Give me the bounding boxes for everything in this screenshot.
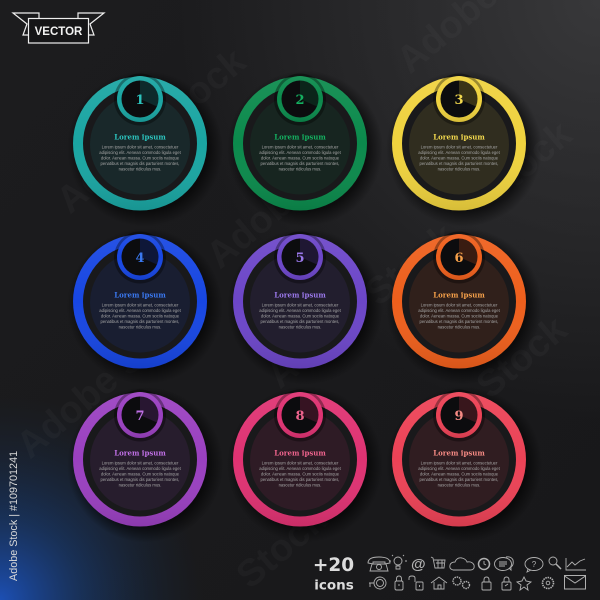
circle 2: adipiscing elit. Aenean commodo ligula eget [259,150,342,155]
circle 3: Lorem ipsum [433,132,485,142]
circle 2: dolor. Aenean massa. Cum sociis natoque [261,156,340,160]
icon: envelope [564,576,586,589]
circle 3: Lorem ipsum dolor sit amet, consectetuer [421,144,498,150]
watermarks: Stock [469,308,576,407]
circle 6: nascetur ridiculus mus. [438,324,480,330]
circle 5: Lorem ipsum dolor sit amet, consectetuer [262,302,339,308]
circle 9: 9 [454,409,464,424]
icon: gears [453,577,470,588]
+20 icons label: +20 [313,555,354,576]
circle 5: 5 [295,251,305,266]
circle 9 [386,386,542,542]
circle 1: Lorem ipsum dolor sit amet, consectetuer [102,144,179,150]
circle 8 [227,386,383,542]
circle 8: dolor. Aenean massa. Cum sociis natoque [261,472,340,476]
circle 5: nascetur ridiculus mus. [279,324,321,330]
icon: question bubble [525,558,543,572]
watermarks: Adobe Stock [9,285,214,467]
badge: vector ribbon: VECTOR [35,26,83,38]
circle 7: Lorem ipsum dolor sit amet, consectetuer [102,460,179,466]
circle 9: nascetur ridiculus mus. [438,482,480,488]
circle 6: Lorem ipsum dolor sit amet, consectetuer [421,302,498,308]
watermarks: Stock [229,498,336,597]
circle 5: Lorem ipsum [274,290,326,300]
circle 9: dolor. Aenean massa. Cum sociis natoque [420,472,499,476]
circle 3: 3 [454,93,464,108]
icon: padlock open [409,576,423,590]
circle 8: penatibus et magnis dis parturient montes, [261,477,339,482]
circle 1: dolor. Aenean massa. Cum sociis natoque [101,156,180,160]
icon: settings burst [542,578,554,588]
badge: vector ribbon [13,13,104,43]
circle 8: Lorem ipsum [274,448,326,458]
watermarks: Adobe Stock [259,215,464,397]
circle 1 [67,70,223,226]
icon: telephone [368,557,390,571]
+20 icons label [313,555,354,594]
icon: chat bubbles [494,557,513,570]
circle 4 [67,228,223,384]
circle 3: adipiscing elit. Aenean commodo ligula eget [418,150,501,155]
circle 5: adipiscing elit. Aenean commodo ligula eget [259,308,342,313]
circle 6 [386,228,542,384]
circle 3: penatibus et magnis dis parturient montes, [420,161,498,166]
icon: clock [478,558,490,570]
circle 9: Lorem ipsum dolor sit amet, consectetuer [421,460,498,466]
icon: at sign: @ [411,556,426,573]
icon: star [517,577,531,590]
circle 4: Lorem ipsum [114,290,166,300]
circle 9: penatibus et magnis dis parturient montes, [420,477,498,482]
stock id caption: Adobe Stock | #109701241 [8,451,20,581]
circle 3: nascetur ridiculus mus. [438,166,480,172]
watermarks: Stock [474,113,581,212]
circle 7 [67,386,223,542]
icon: house [431,577,447,589]
circle 5 [227,228,383,384]
+20 icons label: icons [314,578,354,594]
circle 2: nascetur ridiculus mus. [279,166,321,172]
icon: light bulb [389,555,407,569]
circle 7: adipiscing elit. Aenean commodo ligula eget [99,466,182,471]
circle 7: 7 [135,409,145,424]
circle 4: adipiscing elit. Aenean commodo ligula eget [99,308,182,313]
circle 2 [227,70,383,226]
watermarks: Adobe Stock [49,40,254,222]
circle 9: Lorem ipsum [433,448,485,458]
icon: bag lock locked [502,577,511,590]
circle 8: nascetur ridiculus mus. [279,482,321,488]
icon set [368,555,586,590]
circle 2: Lorem ipsum dolor sit amet, consectetuer [262,144,339,150]
circle 8: 8 [295,409,305,424]
circle 1: nascetur ridiculus mus. [119,166,161,172]
circle 1: Lorem ipsum [114,132,166,142]
circle 4: nascetur ridiculus mus. [119,324,161,330]
circle 3 [386,70,542,226]
icon: question bubble: ? [532,560,537,569]
circle 2: 2 [295,93,305,108]
circle 9: adipiscing elit. Aenean commodo ligula eget [418,466,501,471]
icon: key ring [369,577,386,589]
watermarks: Adobe [199,169,316,277]
circle 6: adipiscing elit. Aenean commodo ligula eget [418,308,501,313]
circle 6: Lorem ipsum [433,290,485,300]
circle 4: dolor. Aenean massa. Cum sociis natoque [101,314,180,318]
icon: cloud [450,558,474,570]
circle 7: Lorem ipsum [114,448,166,458]
circle 4: Lorem ipsum dolor sit amet, consectetuer [102,302,179,308]
circle 7: penatibus et magnis dis parturient montes, [101,477,179,482]
icon: line chart [566,558,586,570]
circle 1: penatibus et magnis dis parturient montes, [101,161,179,166]
circle 7: dolor. Aenean massa. Cum sociis natoque [101,472,180,476]
circle 6: dolor. Aenean massa. Cum sociis natoque [420,314,499,318]
circle 1: adipiscing elit. Aenean commodo ligula eget [99,150,182,155]
circle 5: dolor. Aenean massa. Cum sociis natoque [261,314,340,318]
circle 6: 6 [454,251,464,266]
circle 7: nascetur ridiculus mus. [119,482,161,488]
circle 2: penatibus et magnis dis parturient montes, [261,161,339,166]
icon: bag lock [482,577,491,590]
icon: padlock closed [395,576,403,590]
circle 5: penatibus et magnis dis parturient montes, [261,319,339,324]
circle 1: 1 [135,93,145,108]
circle 6: penatibus et magnis dis parturient montes, [420,319,498,324]
circle 8: Lorem ipsum dolor sit amet, consectetuer [262,460,339,466]
icon: cart [431,557,445,568]
circle 4: 4 [135,251,145,266]
circle 3: dolor. Aenean massa. Cum sociis natoque [420,156,499,160]
circle 2: Lorem ipsum [274,132,326,142]
circle 4: penatibus et magnis dis parturient montes, [101,319,179,324]
icon: magnifier [549,557,561,569]
circle 8: adipiscing elit. Aenean commodo ligula eget [259,466,342,471]
